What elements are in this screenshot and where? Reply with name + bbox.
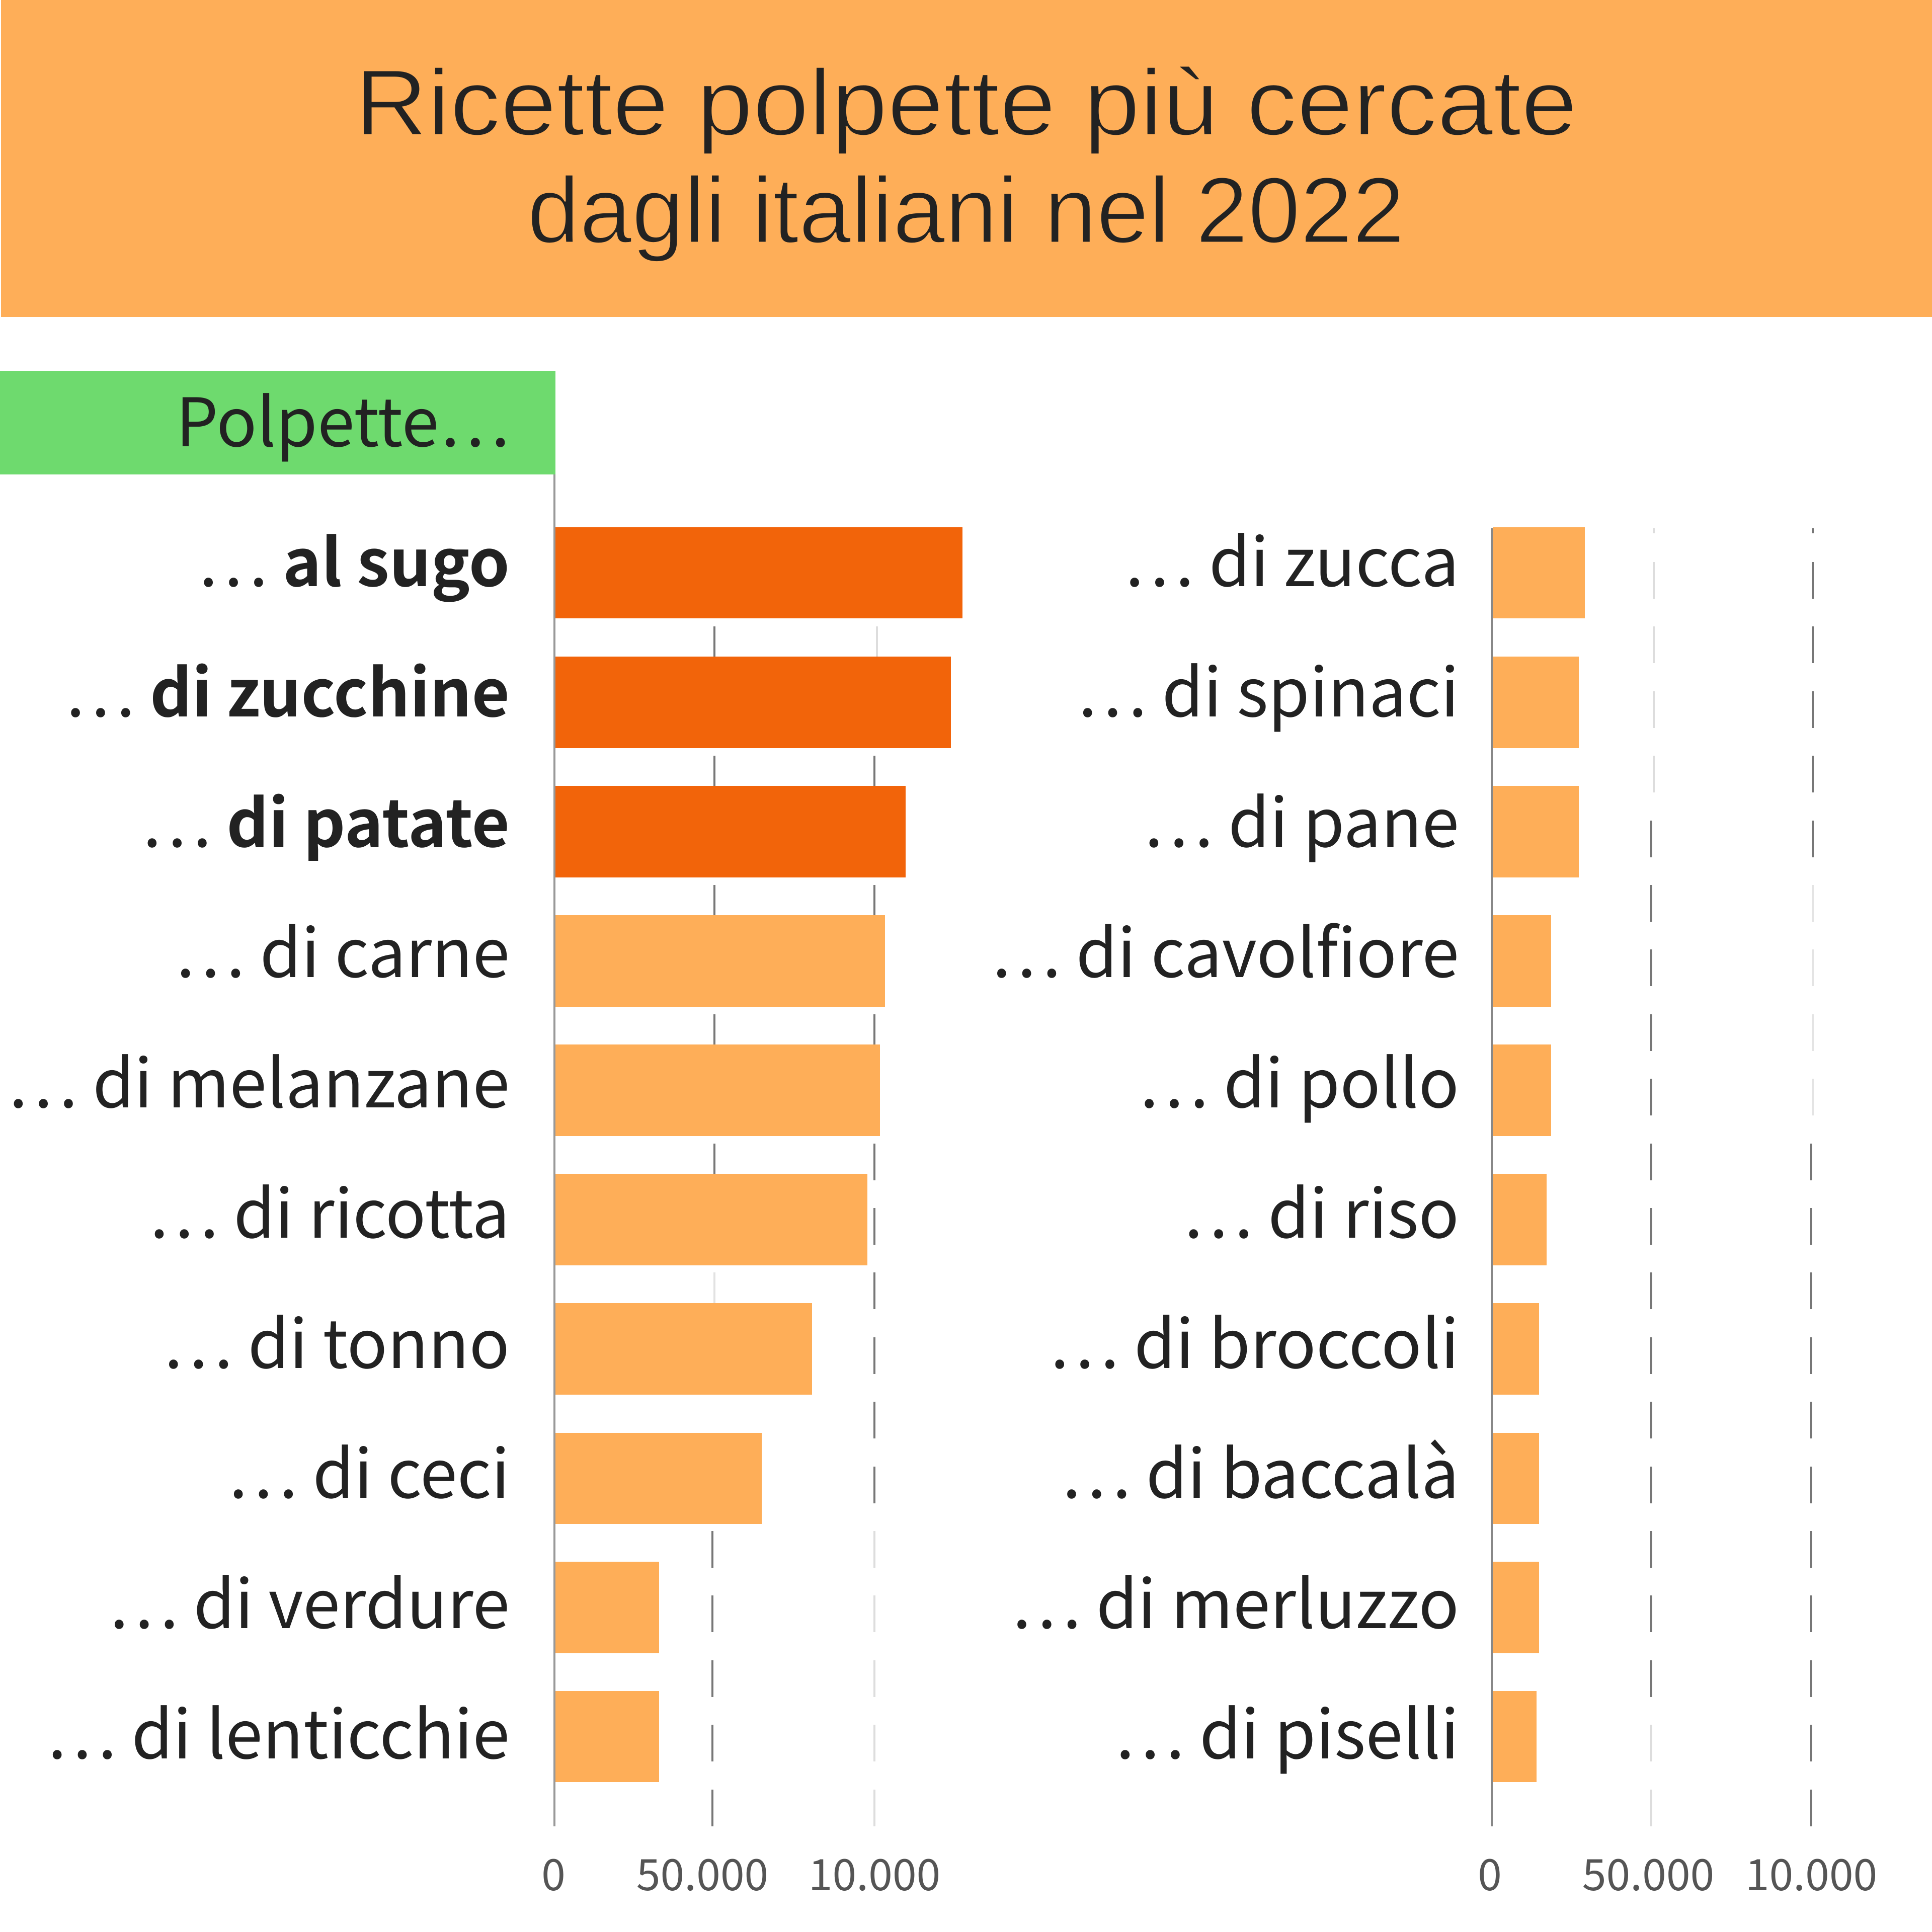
header panel <box>1 0 1932 317</box>
left labels: … di ceci <box>227 1421 510 1517</box>
x axis labels left: 10.000 <box>809 1840 940 1903</box>
bar: di merluzzo <box>1493 1562 1539 1653</box>
right labels: … di cavolfiore <box>990 900 1459 997</box>
right labels: … di riso <box>1182 1161 1459 1257</box>
bar: di tonno <box>555 1303 812 1395</box>
bar: di zucchine <box>555 657 951 748</box>
left labels: … di tonno <box>162 1291 510 1388</box>
title: Ricette polpette più cercate <box>355 51 1577 155</box>
bar: di pane <box>1493 786 1579 877</box>
axis line right <box>1491 528 1493 1826</box>
right labels: … di merluzzo <box>1010 1551 1459 1648</box>
column heading: Polpette… <box>0 369 555 474</box>
x axis labels right <box>1478 1840 1877 1903</box>
right bar chart <box>1492 527 1585 1826</box>
bar: al sugo <box>555 527 962 618</box>
right labels <box>990 509 1459 1778</box>
title: dagli italiani nel 2022 <box>527 158 1405 263</box>
x axis labels left <box>541 1840 940 1903</box>
x axis labels right: 0 <box>1478 1840 1502 1903</box>
right labels: … di spinaci <box>1076 639 1459 736</box>
column heading: Polpette…: Polpette… <box>176 369 510 466</box>
right labels: … di broccoli <box>1048 1291 1459 1388</box>
right labels: … di pane <box>1142 770 1459 866</box>
right labels: … di zucca <box>1123 509 1459 606</box>
bar: di zucca <box>1493 527 1585 618</box>
x axis labels right: 50.000 <box>1582 1840 1714 1903</box>
bar: di spinaci <box>1493 657 1579 748</box>
right labels: … di baccalà <box>1060 1421 1459 1517</box>
bar: di lenticchie <box>555 1691 659 1782</box>
bar: di baccalà <box>1493 1433 1539 1524</box>
grid ticks right chart <box>1651 528 1813 1826</box>
left labels: … di patate <box>140 770 510 866</box>
left labels: … di melanzane <box>7 1030 510 1127</box>
left labels: … di lenticchie <box>46 1681 510 1778</box>
x axis labels right: 10.000 <box>1745 1840 1877 1903</box>
left labels: … di carne <box>174 900 510 997</box>
bar: di ricotta <box>555 1174 867 1265</box>
bar: di melanzane <box>555 1044 880 1136</box>
x axis labels left: 50.000 <box>636 1840 768 1903</box>
title <box>355 51 1577 263</box>
right labels: … di piselli <box>1113 1681 1459 1778</box>
bar: di riso <box>1493 1174 1547 1265</box>
right labels: … di pollo <box>1138 1030 1459 1127</box>
left labels: … al sugo <box>197 509 510 606</box>
left labels: … di ricotta <box>148 1161 510 1257</box>
grid ticks left chart <box>712 562 877 1826</box>
bar: di cavolfiore <box>1493 915 1551 1007</box>
left labels: … di zucchine <box>64 639 510 736</box>
bar: di patate <box>555 786 906 877</box>
left labels <box>7 509 510 1778</box>
axis line left <box>553 474 555 1826</box>
bar: di pollo <box>1493 1044 1551 1136</box>
bar: di piselli <box>1493 1691 1537 1782</box>
bar: di ceci <box>555 1433 762 1524</box>
bar: di carne <box>555 915 885 1007</box>
x axis labels left: 0 <box>541 1840 566 1903</box>
bar: di verdure <box>555 1562 659 1653</box>
bar: di broccoli <box>1493 1303 1539 1395</box>
left labels: … di verdure <box>108 1551 510 1648</box>
left bar chart <box>554 474 962 1826</box>
